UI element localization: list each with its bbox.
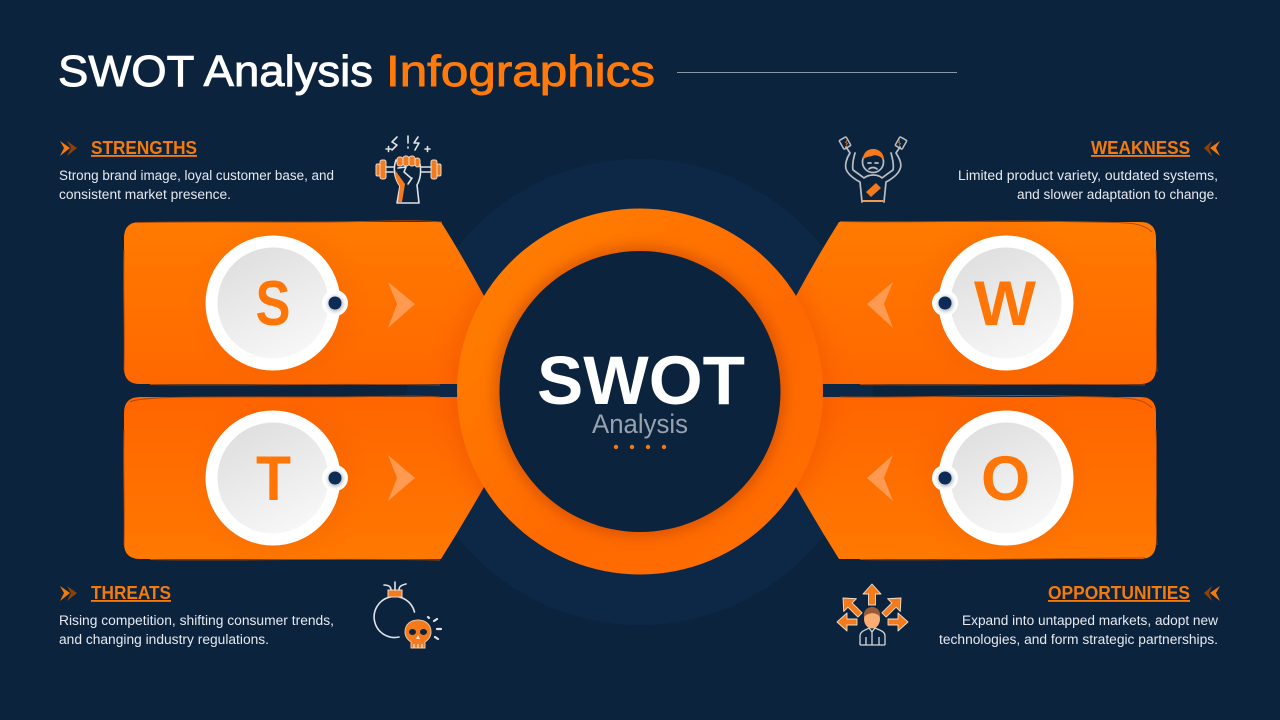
text block: weakness: WEAKNESS bbox=[1091, 137, 1190, 158]
text block: weakness: Limited product variety, outdated systems, bbox=[958, 168, 1218, 183]
badge: W bbox=[932, 236, 1074, 370]
text block: opportunities: Expand into untapped markets, adopt new bbox=[962, 613, 1218, 628]
panel: threats card bbox=[124, 396, 500, 560]
center label: SWOT bbox=[537, 342, 745, 419]
badge: T: T bbox=[256, 444, 291, 514]
center label: Analysis bbox=[592, 409, 688, 439]
text block: threats: and changing industry regulations. bbox=[59, 632, 269, 647]
badge: S: S bbox=[256, 269, 290, 339]
text block: threats: Rising competition, shifting consumer trends, bbox=[59, 613, 334, 628]
panel: strengths card bbox=[124, 221, 500, 385]
title: SWOT Analysis bbox=[58, 47, 373, 96]
text block: weakness: and slower adaptation to change. bbox=[1017, 187, 1218, 202]
arrow: S bbox=[388, 282, 415, 328]
badge: W: W bbox=[974, 269, 1037, 339]
text block: weakness bbox=[958, 137, 1220, 202]
panel: weakness card bbox=[780, 221, 1157, 385]
ring shadow on cards bbox=[208, 202, 1072, 582]
badge: O: O bbox=[981, 444, 1030, 514]
badge: T bbox=[206, 410, 348, 546]
text block: opportunities: OPPORTUNITIES bbox=[1048, 582, 1190, 603]
arrow: W bbox=[867, 282, 893, 328]
icon: person with arrows bbox=[837, 584, 908, 645]
text block: opportunities: technologies, and form strategic partnerships. bbox=[939, 632, 1218, 647]
text block: strengths: STRENGTHS bbox=[91, 137, 197, 158]
icon: frustrated man with bolts bbox=[839, 137, 907, 202]
arrow: T bbox=[388, 455, 415, 501]
text block: strengths: Strong brand image, loyal customer base, and bbox=[59, 168, 334, 183]
title: Infographics bbox=[386, 47, 655, 96]
arrow: O bbox=[867, 455, 893, 501]
text block: threats bbox=[59, 582, 334, 647]
text block: opportunities bbox=[939, 582, 1220, 647]
background halo circle bbox=[407, 159, 873, 625]
icon: bomb with skull bbox=[374, 582, 441, 648]
text block: strengths bbox=[59, 137, 334, 202]
text block: threats: THREATS bbox=[91, 582, 171, 603]
text block: strengths: consistent market presence. bbox=[59, 187, 231, 202]
badge: O bbox=[932, 410, 1074, 546]
title bbox=[58, 47, 655, 96]
icon: fist with dumbbell bbox=[376, 136, 441, 203]
badge: S bbox=[206, 236, 348, 370]
panel: opportunities card bbox=[780, 395, 1157, 560]
center ring bbox=[457, 208, 823, 574]
